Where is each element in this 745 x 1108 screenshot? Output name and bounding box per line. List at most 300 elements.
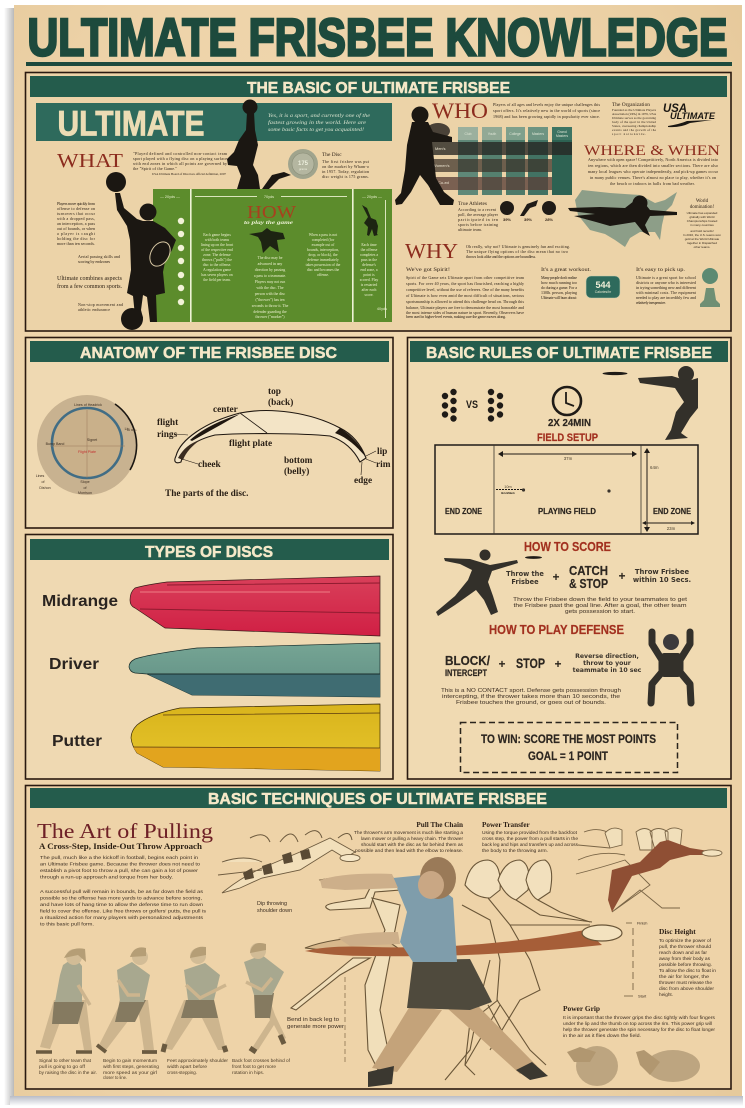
disc height note: reach down and as far: [659, 950, 707, 955]
pull the chain note: [354, 821, 464, 853]
how text column 1: disc to the offense.: [203, 263, 231, 267]
how heading: [244, 202, 296, 226]
workout note: do during a game. For a: [541, 285, 577, 290]
caption 1: pull is going to go off: [39, 1064, 86, 1069]
the disc note: disc weight is 175 grams.: [322, 174, 369, 179]
caption 2: closer to line.: [103, 1075, 127, 1080]
what quote: USA Ultimate Board of Directors official definition, 2007: [152, 172, 226, 177]
disc top diagram: of: [42, 480, 44, 484]
team dots versus: [442, 389, 503, 422]
spirit note: of Ultimate is how even amid the most difficult of situations, serious: [406, 293, 524, 299]
what text block: scoring by endzones: [78, 259, 110, 264]
spirit note: Spirit of the Game sets Ultimate apart from other competitive team: [406, 275, 525, 280]
where and when text: [588, 157, 719, 186]
how text column 1: Each game begins: [203, 233, 231, 237]
how text column 3: bounds, interception,: [307, 248, 339, 253]
how text column 2: with the disc. The: [256, 286, 284, 290]
defense equation: BLOCK/: [445, 653, 490, 668]
why text: The unique flying options of the disc mean that no two: [466, 249, 568, 254]
bend leg label: [287, 1017, 344, 1030]
score equation: CATCH: [569, 563, 608, 578]
world domination note: together in Dispatched: [687, 241, 717, 245]
art of pulling title: A Cross-Step, Inside-Out Throw Approach: [39, 841, 202, 851]
score explanation: gets possession to start.: [565, 609, 635, 615]
disc profile diagram: rim: [376, 460, 391, 470]
disc height note: possible before throwing.: [659, 962, 712, 967]
23m arrow: [642, 521, 695, 531]
how text column 3: [306, 233, 341, 277]
what quote: the "Spirit of the Game.": [133, 166, 177, 171]
shoes: [368, 1066, 394, 1087]
score equation: Throw Frisbee: [635, 568, 689, 576]
who text: [493, 102, 600, 119]
head: [418, 857, 456, 899]
organization note: sport nationwide.: [612, 132, 646, 136]
caption 1: by raising the disc in the air.: [39, 1070, 97, 1075]
the disc note: in 1957. Today, regulation: [322, 169, 369, 175]
workout note: Many people don't realize: [541, 275, 577, 280]
callout: to win: TO WIN: SCORE THE MOST POINTS: [481, 732, 656, 746]
behind figures: [291, 860, 592, 1080]
pull the chain note: lawn mower or pulling a heavy chain. The thrower: [361, 836, 463, 841]
easy note: needed to play are incredibly few and: [636, 295, 696, 300]
true athletes note: ultimate team.: [458, 227, 482, 232]
what quote: sport played with a flying disc on a playing surface: [133, 156, 227, 161]
how text column 1: throws ("pulls") the: [202, 258, 232, 262]
score equation: +: [552, 570, 560, 584]
pull the chain note: The thrower's arm movement is much like starting a: [354, 830, 463, 835]
icon: frisbee in flight: [525, 556, 542, 559]
icon: diving player silhouette: [568, 196, 677, 236]
workout note: how much running too: [541, 280, 577, 285]
how text column 3: example out of: [312, 243, 335, 247]
panel heading: types: TYPES OF DISCS: [145, 544, 273, 561]
who text: Players of all ages and levels enjoy the unique challenges this: [493, 102, 600, 107]
how text column 2: person with the disc: [255, 292, 286, 296]
chart: who plays grid: Masters: [532, 132, 544, 136]
the disc note: The first frisbee was put: [322, 159, 370, 164]
dip throwing label: Dip throwing: [257, 901, 287, 907]
disc height guide: Start: [638, 994, 647, 998]
disc profile diagram: bottom: [284, 456, 313, 466]
field width markers: — 20yds —: [160, 195, 180, 199]
disc height note: To allow the disc to float in: [659, 968, 716, 973]
art of pulling title: The Art of Pulling: [37, 819, 214, 843]
caption 4: [232, 1058, 291, 1075]
sequence sketch: power transfer: [576, 828, 722, 912]
who text: 1968) and has been growing rapidly in popularity ever since.: [493, 114, 600, 119]
athletic stats icons: 39%: [503, 217, 511, 222]
art of pulling paragraph 1: through a run-up approach and torque from her body.: [40, 874, 173, 880]
world domination note: Championships hosted: [687, 219, 718, 223]
world domination note: in many countries: [690, 223, 714, 227]
how text column 4: end zone, a: [360, 268, 378, 273]
calories badge: Calories/hr: [595, 290, 612, 294]
driver disc: [49, 643, 380, 697]
ultimate banner: fastest growing in the world. Here are: [268, 121, 367, 126]
how text column 2: Players may not run: [255, 280, 285, 284]
how text column 2: defender guarding the: [253, 310, 287, 314]
organization note: Association (UPA) in 1979, USA: [612, 112, 657, 117]
disc height note: To optimize the power of: [659, 938, 712, 943]
how text column 3: offense.: [317, 273, 329, 277]
field diagram: [435, 445, 698, 534]
how text column 1: A regulation game: [203, 268, 231, 272]
disc: [582, 925, 622, 941]
chart: who plays grid: Grand: [557, 130, 567, 134]
athletic stats icons: [500, 200, 556, 222]
disc profile diagram: rings: [157, 430, 178, 440]
art of pulling paragraph 1: The pull, much like a the kickoff in football, begins each point in: [40, 855, 199, 860]
art of pulling paragraph 1: [40, 855, 201, 880]
how to play defense heading: HOW TO PLAY DEFENSE: [489, 622, 624, 637]
art of pulling paragraph 2: possible so the offense has more yards to advance before scoring,: [40, 896, 202, 900]
caption 4: Back foot crosses behind of: [232, 1058, 291, 1063]
panel heading: anatomy: ANATOMY OF THE FRISBEE DISC: [80, 345, 337, 362]
disc height guide: [624, 920, 647, 998]
brick mark: 10m: [504, 485, 512, 489]
power grip note: help the thrower generate the spin necessary for the disc to float longer: [563, 1027, 715, 1032]
true athletes note: sports before training: [458, 222, 498, 227]
where and when text: in many public venues. There's almost no place to play, whether it's on: [590, 175, 716, 181]
how text column 1: the field per team.: [203, 278, 231, 282]
caption 2: with first steps, generating: [103, 1064, 160, 1069]
panel heading: types: [30, 539, 389, 561]
map of usa: [575, 190, 677, 247]
how text column 2: [252, 256, 289, 319]
caption 1: [39, 1058, 97, 1075]
panel heading: basics: [30, 76, 727, 97]
panel heading: rules: BASIC RULES OF ULTIMATE FRISBEE: [426, 345, 712, 362]
dip throwing label: [257, 901, 292, 914]
how text column 4: [360, 243, 378, 297]
defense equation: Reverse direction,: [575, 653, 639, 660]
runner: step 2: [97, 947, 157, 1052]
64m arrow: 64m: [650, 465, 659, 470]
what text block: Aerial passing skills and: [78, 254, 120, 259]
defense equation: +: [554, 657, 562, 671]
workout note: [541, 267, 591, 300]
midrange disc: [42, 576, 380, 636]
who heading: WHO: [432, 98, 488, 123]
score equation: within 10 Secs.: [633, 576, 691, 584]
pull the chain note: possible and then lead with the elbow to release.: [355, 848, 463, 853]
disc top diagram: [36, 395, 137, 495]
chart: who plays grid: College: [509, 132, 521, 136]
why text: [466, 244, 570, 259]
panel: types of discs: [26, 534, 393, 779]
USA Ultimate logo: USA: [663, 101, 687, 115]
field diagram: PLAYING FIELD: [538, 507, 596, 516]
defense equation: INTERCEPT: [445, 668, 487, 679]
field width markers: — 20yds —: [362, 195, 382, 199]
panel: the basic of ultimate frisbee: [26, 72, 731, 331]
world domination note: In 2016, the U.S. teams won: [683, 233, 721, 237]
how text column 1: zone. The defense: [203, 253, 231, 257]
how text column 4: the offense: [361, 248, 378, 252]
why heading: WHY: [405, 239, 458, 263]
defense equation: +: [498, 657, 506, 671]
disc height note: height.: [659, 992, 673, 997]
art of pulling paragraph 2: to this basic pull form.: [40, 922, 94, 926]
step captions: [39, 1058, 291, 1080]
organization note: events and the growth of the: [612, 128, 657, 132]
art of pulling paragraph 2: [40, 889, 207, 926]
power grip note: It is important that the thrower grips the disc tightly with four fingers: [563, 1015, 716, 1020]
score equation: Throw the: [506, 570, 544, 578]
field width markers: [160, 195, 387, 318]
runner: step 4: [244, 943, 286, 1052]
panel: anatomy of the frisbee disc: [26, 338, 393, 528]
what text block: from a few common sports.: [57, 283, 122, 290]
what text block: an interception, a pass: [57, 221, 95, 227]
how text column 4: defense's: [362, 263, 376, 267]
panel: how to play field: [153, 189, 392, 322]
chart: who plays grid: Women's: [433, 163, 449, 168]
what text block: Players move quickly from: [57, 201, 96, 206]
art of pulling paragraph 2: and have lots of hang time to allow the defense time to run down: [40, 902, 204, 907]
disc profile diagram: edge: [354, 476, 372, 486]
art of pulling paragraph 2: a ritualized action for many players with personalized adjustments: [40, 915, 204, 920]
power transfer note: Using the torque provided from the backfoot: [482, 830, 578, 835]
art of pulling paragraph 2: A successful pull will remain in bounds, be as far down the field as: [40, 889, 204, 894]
runner: step 1: [36, 948, 92, 1052]
art of pulling paragraph 2: field to cover the offense. Like free throws or golfers' putts, the pull is: [40, 908, 207, 914]
where and when text: many local leagues who operate independently, and pick-up games occur: [588, 169, 719, 175]
how text column 1: with both teams: [205, 238, 230, 242]
defense equation: throw to your: [583, 660, 632, 667]
panel heading: techniques: BASIC TECHNIQUES OF ULTIMATE FRISBEE: [208, 791, 547, 808]
calories badge: 544: [595, 280, 611, 290]
power transfer note: back leg and hips and transfers up and across: [482, 842, 579, 847]
icon: walking player with disc: [395, 106, 454, 205]
disc profile diagram: lip: [377, 447, 387, 457]
true athletes note: [458, 202, 499, 232]
driver disc: Driver: [49, 656, 99, 673]
disc profile diagram: flight plate: [229, 439, 272, 449]
disc top diagram: Dishon: [39, 486, 51, 490]
ultimate banner: ULTIMATE: [58, 104, 204, 144]
disc top diagram: Lines: [36, 474, 44, 478]
calories badge: [586, 276, 620, 298]
disc height note: [659, 927, 716, 997]
chart: who plays grid: [430, 127, 572, 195]
team dots versus: VS: [466, 399, 478, 411]
icon: throwing silhouette: [638, 366, 698, 440]
field dots: [178, 218, 184, 305]
chart: who plays grid: Co-ed: [438, 180, 449, 185]
game length: 2X 24MIN: [548, 418, 591, 429]
art of pulling title: [37, 819, 214, 851]
what heading: WHAT: [57, 150, 123, 172]
how text column 3: When a pass is not: [309, 233, 338, 237]
panel: basic rules of ultimate frisbee: [408, 338, 731, 779]
power grip note: in the air as it flies down the field.: [563, 1033, 641, 1038]
easy note: relatively inexpensive.: [636, 300, 666, 305]
defense explanation: This is a NO CONTACT sport. Defense gets possession through: [441, 688, 621, 694]
score explanation: the Frisbee past the goal line. After a goal, the other team: [514, 603, 686, 609]
power grip note: under the lip and the thumb on top across the rim. This power grip will: [563, 1021, 712, 1026]
callout: to win: GOAL = 1 POINT: [528, 749, 609, 763]
how text column 2: ("thrower") has ten: [255, 298, 285, 302]
world domination note: globally with World: [690, 215, 715, 219]
icon: defender pictogram: [651, 632, 691, 703]
world domination note: domination!: [690, 205, 715, 210]
why text: Oh really, why not? Ultimate is genuinely fun and exciting.: [466, 244, 570, 250]
panel: basic techniques of ultimate frisbee: [26, 786, 731, 1089]
how text column 4: completes a: [360, 253, 378, 257]
who text: sport offers. It's relatively new in the world of sports (since: [493, 108, 600, 113]
what text block: [57, 201, 123, 312]
disc height note: disc from above shoulder: [659, 986, 714, 991]
sequence sketch: pull chain: [218, 831, 360, 893]
how text column 4: scored. Play: [360, 278, 378, 282]
icon: small thrower: [362, 205, 378, 236]
icon: player with ball silhouette: [106, 172, 176, 330]
defense explanation: intercepting, if the thrower takes more than 10 seconds, the: [442, 694, 620, 700]
caption 4: rotation in hips.: [232, 1070, 264, 1075]
shorts: [407, 959, 492, 1010]
ultimate banner: [36, 103, 392, 144]
chart: who plays grid: Masters: [556, 134, 568, 138]
icon: clock: [553, 387, 581, 415]
organization note: Founded as the Ultimate Players: [612, 108, 657, 112]
pull the chain note: should start with the disc as far behind them as: [361, 842, 464, 847]
icon: two players: [249, 228, 285, 253]
score explanation: [513, 597, 688, 615]
workout note: Ultimate will burn about:: [541, 295, 577, 300]
37m arrow: 37m: [564, 456, 573, 461]
disc profile diagram: (belly): [284, 466, 309, 477]
athletic stats icons: 28%: [545, 217, 553, 222]
defense explanation: Frisbee touches the ground, or goes out of bounds.: [456, 700, 606, 706]
score equation: [506, 563, 691, 591]
how text column 2: thrower ("marker"): [255, 315, 285, 319]
spirit note: sports. For over 40 years, the sport has flourished, reaching a highly: [406, 281, 524, 287]
pull the chain note: Pull The Chain: [416, 821, 463, 829]
caption 1: Signal to other team that: [39, 1058, 92, 1063]
world domination note: and hold records!: [690, 229, 714, 233]
icon: football held: [146, 238, 174, 270]
disc swoosh: [305, 930, 602, 956]
disc profile diagram: center: [213, 405, 238, 415]
chart: who plays grid: Youth: [488, 132, 496, 136]
USA Ultimate logo: ULTIMATE: [670, 111, 716, 121]
disc top diagram: Signet: [87, 438, 97, 442]
what text block: with a dropped pass,: [57, 216, 95, 222]
organization note: Ultimate serves as the governing: [612, 116, 656, 120]
what quote: [133, 151, 228, 177]
why text: throws look alike and the options are boundless.: [466, 254, 536, 259]
power transfer note: cross step, the power from a pull starts in the: [482, 836, 578, 841]
what text block: holding the disc for: [57, 236, 96, 241]
art of pulling paragraph 1: an Ultimate Frisbee game. Because the thrower does not need to: [40, 862, 201, 866]
how text column 1: [201, 233, 234, 282]
caption 3: Feet approximately shoulder: [167, 1058, 229, 1063]
disc profile diagram: flight: [157, 418, 179, 428]
how text column 4: after each: [362, 288, 377, 292]
midrange disc: Midrange: [42, 593, 118, 610]
power grip hands: [567, 1046, 700, 1086]
caption 3: [167, 1058, 229, 1075]
ultimate banner: some basic facts to get you acquainted!: [268, 128, 365, 133]
world domination note: World: [696, 199, 709, 204]
score equation: & STOP: [569, 576, 608, 591]
ultimate banner: Yes, it is a sport, and currently one of the: [268, 114, 371, 119]
disc height note: the air for longer, the: [659, 974, 710, 979]
how text column 1: has seven players on: [201, 273, 233, 277]
score equation: Frisbee: [511, 578, 539, 586]
easy note: It's easy to pick up.: [636, 267, 685, 273]
how text column 3: defense immediately: [307, 258, 339, 262]
athletic stats icons: 39%: [524, 217, 532, 222]
chart: who plays grid: Men's: [435, 146, 446, 151]
defense equation: STOP: [516, 655, 545, 671]
disc top diagram: Lip: [125, 427, 129, 431]
world domination note: other teams.: [694, 245, 710, 249]
how text column 4: is restarted: [361, 283, 377, 287]
how text column 3: disc and becomes the: [307, 268, 339, 272]
where and when heading: WHERE & WHEN: [584, 143, 720, 159]
true athletes note: According to a recent: [458, 207, 497, 212]
disc height note: Disc Height: [659, 927, 696, 936]
how text column 2: advanced in any: [258, 262, 282, 266]
torso: [393, 875, 457, 962]
field width markers: 40yds: [377, 307, 387, 311]
caption 2: [103, 1058, 160, 1080]
how text column 4: score.: [365, 293, 374, 297]
callout: to win: [460, 722, 678, 772]
spirit note: We've got Spirit!: [406, 267, 450, 273]
disc top diagram: Flight Plate: [78, 450, 96, 454]
23m arrow: 23m: [667, 526, 676, 531]
organization note: States, overseeing championship: [612, 124, 656, 129]
disc height note: pull, the thrower should: [659, 944, 711, 949]
easy note: with minimal costs. The equipment: [636, 290, 697, 295]
panel heading: techniques: [30, 788, 727, 808]
defense equation: [445, 653, 642, 679]
what text block: more than ten seconds.: [57, 241, 95, 246]
where and when text: the beach or indoors in halls from bad weather.: [610, 181, 695, 186]
how text column 1: of the respective end: [201, 248, 233, 252]
the disc note: The Disc: [322, 152, 342, 158]
how text column 4: pass in the: [361, 258, 377, 262]
score equation: +: [618, 569, 626, 583]
where and when text: ten regions, which are then divided into smaller sections. There are also: [588, 163, 718, 169]
power grip note: [563, 1004, 716, 1038]
organization note: [612, 103, 657, 136]
world domination note: Ultimate has expanded: [687, 211, 718, 215]
power grip note: Power Grip: [563, 1004, 600, 1013]
what text block: athletic endurance: [78, 307, 110, 312]
how text column 2: direction by passing: [255, 268, 285, 272]
field diagram: END ZONE: [445, 507, 483, 516]
the disc note: [322, 152, 370, 179]
easy note: Ultimate is a great sport for school: [636, 275, 697, 280]
disc top diagram: or Rim: [128, 428, 137, 432]
icon: jumping player silhouette: [227, 100, 291, 189]
disc top diagram: of: [84, 486, 86, 490]
disc profile diagram: (back): [268, 397, 293, 408]
field diagram: END ZONE: [653, 507, 692, 516]
disc profile diagram: top: [268, 387, 281, 397]
what text block: Non-stop movement and: [78, 302, 123, 307]
64m arrow: [644, 448, 659, 532]
disc height note: thrower must release the: [659, 980, 712, 985]
field setup heading: FIELD SETUP: [537, 432, 598, 444]
37m arrow: [498, 451, 637, 461]
panel heading: anatomy: [30, 341, 389, 362]
